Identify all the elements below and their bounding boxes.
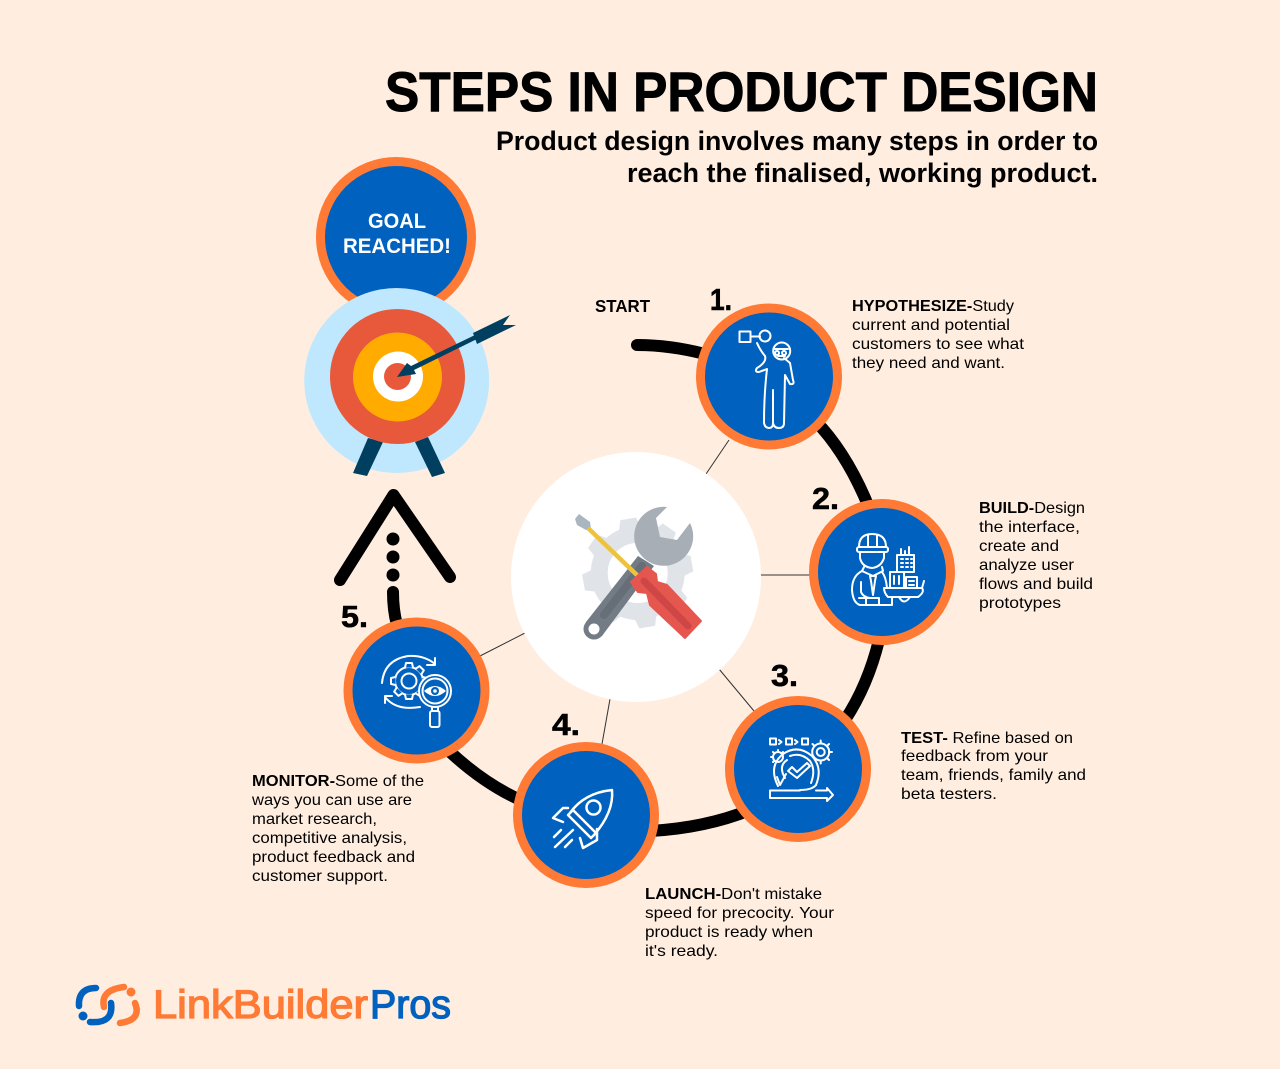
logo: Pros — [370, 983, 451, 1027]
icon: rocket — [553, 790, 612, 848]
text: monitor: competitive analysis, — [252, 830, 407, 847]
icon: engineer and building — [852, 534, 924, 605]
title: STEPS IN PRODUCT DESIGN — [385, 60, 1098, 123]
text: monitor — [251, 773, 424, 885]
number 1: 1. — [710, 282, 732, 317]
text: hypothesize: current and potential — [852, 317, 1010, 334]
number 5: 5. — [341, 599, 368, 634]
icon: wrench — [584, 507, 693, 640]
text: build: prototypes — [979, 595, 1061, 612]
goal badge: REACHED! — [343, 235, 451, 258]
step 3 — [730, 700, 866, 838]
icon: screwdriver — [575, 514, 701, 638]
goal badge: GOAL — [368, 210, 426, 233]
text: build: create and — [979, 538, 1059, 555]
text: hypothesize: they need and want. — [852, 355, 1005, 372]
subtitle: Product design involves many steps in order to — [496, 126, 1098, 156]
up arrow with dots — [340, 495, 450, 582]
text: launch — [645, 886, 835, 960]
wordmark: LinkBuilder — [153, 983, 368, 1027]
start label: START — [595, 296, 650, 316]
text: build: the interface, — [979, 519, 1080, 536]
text: hypothesize: customers to see what — [852, 336, 1025, 353]
text: build — [979, 500, 1093, 612]
subtitle: reach the finalised, working product. — [627, 158, 1098, 188]
number 2: 2. — [812, 481, 839, 516]
goal badge — [320, 162, 472, 312]
text: test — [901, 730, 1086, 803]
text: monitor: customer support. — [252, 868, 388, 885]
step 1 — [700, 308, 838, 445]
text: monitor: MONITOR-Some of the — [252, 773, 424, 790]
process path — [393, 345, 879, 831]
step 5 — [348, 622, 485, 759]
text: launch: speed for precocity. Your — [645, 905, 835, 922]
text: build: BUILD-Design — [979, 500, 1085, 517]
text: monitor: ways you can use are — [251, 792, 412, 809]
subtitle — [496, 126, 1098, 188]
icon: thinking person — [740, 330, 794, 428]
step 4 — [518, 746, 654, 884]
connector lines — [480, 440, 810, 744]
text: launch: product is ready when — [645, 924, 813, 941]
number 4: 4. — [552, 707, 580, 742]
icon: gear and magnifier — [382, 656, 451, 727]
text: test: beta testers. — [901, 786, 997, 803]
icon: testing cycle — [770, 738, 833, 801]
text: test: team, friends, family and — [901, 767, 1086, 784]
icon: chain links — [78, 987, 137, 1023]
text: test: TEST- Refine based on — [901, 730, 1073, 747]
text: build: flows and build — [979, 576, 1093, 593]
icon: gear — [582, 517, 694, 629]
text: hypothesize: HYPOTHESIZE-Study — [852, 298, 1014, 315]
text: test: feedback from your — [901, 748, 1049, 765]
text: monitor: product feedback and — [252, 849, 415, 866]
text: hypothesize — [852, 298, 1025, 372]
step 2 — [814, 504, 950, 640]
centre tools circle — [511, 452, 761, 702]
number 3: 3. — [771, 658, 798, 693]
logo — [78, 983, 451, 1027]
text: monitor: market research, — [252, 811, 377, 828]
text: build: analyze user — [979, 557, 1075, 574]
text: launch: it's ready. — [645, 943, 718, 960]
text: launch: LAUNCH-Don't mistake — [645, 886, 822, 903]
icon: target with arrow — [304, 288, 516, 477]
